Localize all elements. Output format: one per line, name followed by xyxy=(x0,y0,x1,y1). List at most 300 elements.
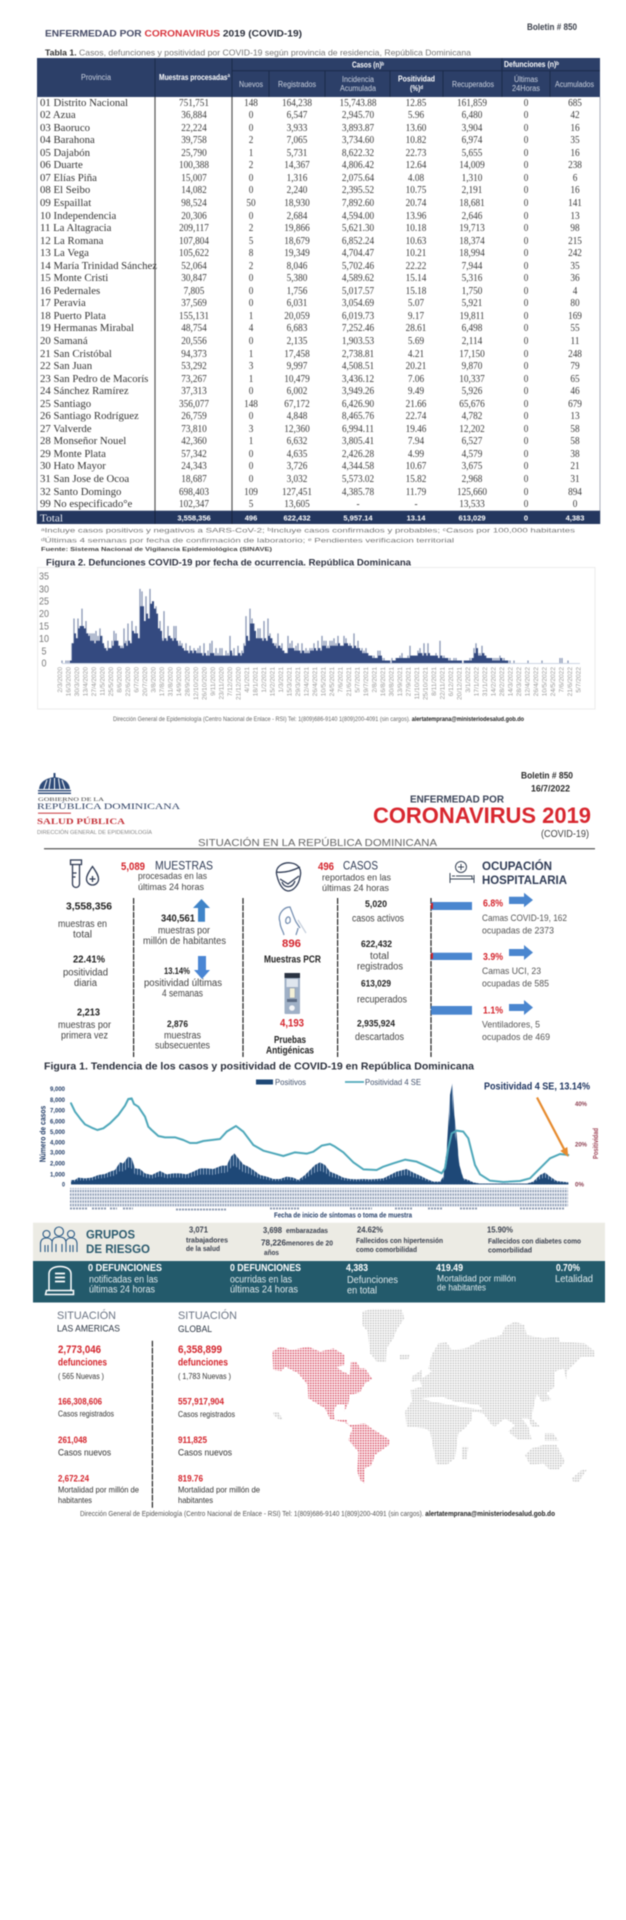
risk: pregnant and minors: embarazadas xyxy=(286,1226,328,1235)
column: registered cases: 6,002 xyxy=(287,385,307,397)
column: new cases: 0 xyxy=(249,448,253,460)
column: registered cases: 6,683 xyxy=(287,322,307,334)
date axis labels: 2/8/2021 xyxy=(372,667,378,693)
column: province: 11 La Altagracia xyxy=(40,222,111,234)
title block xyxy=(373,794,591,840)
bars: daily deaths xyxy=(62,589,568,663)
column: new cases: 1 xyxy=(249,435,253,447)
column: samples per million and positivity: 13.14% xyxy=(164,966,190,976)
table header: Últimas xyxy=(514,75,538,84)
column: case status: descartados xyxy=(355,1032,404,1043)
column: registered cases: 127,451 xyxy=(282,486,312,498)
column: sample totals: diaria xyxy=(74,978,98,989)
column: recovered: 10,337 xyxy=(459,373,485,385)
casos heading: últimas 24 horas xyxy=(322,883,389,894)
column: province: 06 Duarte xyxy=(40,159,82,171)
column: registered cases: 2,135 xyxy=(287,335,307,347)
date axis labels: 16/3/2020 xyxy=(66,667,72,696)
date axis labels: 4/1/2021 xyxy=(244,667,251,693)
column: samples processed: 751,751 xyxy=(179,97,209,109)
column: samples processed: 36,884 xyxy=(181,109,207,121)
column: province: 14 María Trinidad Sánchez xyxy=(40,260,157,272)
date axis labels: 30/3/2020 xyxy=(74,667,81,696)
column: province: 21 San Cristóbal xyxy=(40,348,111,360)
column: recovered: 3,675 xyxy=(462,460,482,472)
column: deaths last 24 hours: 0 xyxy=(524,235,528,247)
column: registered cases: 19,349 xyxy=(284,247,310,259)
column: registered cases: 3,933 xyxy=(287,122,307,134)
table total row: 613,029 xyxy=(458,513,486,522)
column: samples processed: 30,847 xyxy=(181,272,207,284)
column: cumulative deaths: 0 xyxy=(573,498,577,510)
column: cumulative incidence: 3,436.12 xyxy=(342,373,374,385)
column: cumulative incidence: 3,734.60 xyxy=(342,134,374,146)
panel: situation in the Americas: LAS AMERICAS xyxy=(57,1324,120,1335)
antigen stat: 4,193 xyxy=(280,1017,304,1029)
date axis labels: 7/6/2022 xyxy=(558,667,566,693)
risk: pregnant and minors: 3,698 xyxy=(263,1226,283,1235)
column: positivity: 20.74 xyxy=(406,197,426,209)
table footnotes: ᵃIncluye casos positivos y negativos a SARS-CoV-2; ᵇIncluye casos confirmados y probables; ᶜCasos por 100,000 habitantes xyxy=(41,527,576,534)
column: samples processed: 7,805 xyxy=(184,285,204,297)
risk: diabetes: 15.90% xyxy=(487,1226,513,1234)
muestras heading xyxy=(121,860,213,893)
column: samples processed: 98,524 xyxy=(181,197,207,209)
date axis labels: 21/6/2021 xyxy=(346,667,353,696)
table header: Acumulados xyxy=(555,80,594,89)
column: samples processed: 698,403 xyxy=(179,486,209,498)
column: registered cases: 164,238 xyxy=(282,97,312,109)
column: samples processed: 73,810 xyxy=(181,423,207,435)
column: recovered: 13,533 xyxy=(459,498,485,510)
lethality: 0.70% xyxy=(556,1263,580,1274)
date axis labels: 28/2/2022 xyxy=(499,667,506,696)
column: cumulative incidence: 4,704.47 xyxy=(342,247,374,259)
risk: pregnant and minors: menores de 20 xyxy=(286,1238,333,1248)
column: cumulative deaths: 215 xyxy=(568,235,582,247)
table footnotes xyxy=(41,527,576,553)
column: deaths last 24 hours: 0 xyxy=(524,435,528,447)
panel: global situation: defunciones xyxy=(178,1358,228,1369)
column: samples processed xyxy=(178,97,210,510)
column: recovered: 17,150 xyxy=(459,348,485,360)
table header: Nuevos xyxy=(239,80,263,89)
column: cumulative deaths: 58 xyxy=(570,423,580,435)
column: cumulative deaths: 16 xyxy=(570,184,580,196)
date axis labels: 17/8/2020 xyxy=(159,667,166,696)
icon: tombstone xyxy=(46,1266,74,1294)
column: case status: 622,432 xyxy=(361,939,392,950)
muestras heading: MUESTRAS xyxy=(155,860,213,872)
column: registered cases: 18,679 xyxy=(284,235,310,247)
map: rest of the world xyxy=(273,1309,595,1482)
column: samples processed: 356,077 xyxy=(179,398,209,410)
date axis labels: 25/5/2020 xyxy=(108,667,115,696)
table total row: Total xyxy=(40,512,63,524)
panel: risk groups: GRUPOS xyxy=(86,1228,135,1242)
column: province: 30 Hato Mayor xyxy=(40,460,105,472)
column: positivity: 11.79 xyxy=(406,486,426,498)
column: samples processed: 20,556 xyxy=(181,335,207,347)
column: samples processed: 14,082 xyxy=(181,184,207,196)
column: sample totals: 22.41% xyxy=(73,953,106,965)
column: cumulative incidence: 15,743.88 xyxy=(340,97,376,109)
chart: deaths by date xyxy=(38,568,595,709)
column: registered cases: 2,684 xyxy=(287,210,307,222)
right axis labels xyxy=(575,1101,600,1188)
column: positivity: 10.82 xyxy=(406,134,426,146)
column: positivity: 22.22 xyxy=(406,260,426,272)
column: province: 26 Santiago Rodríguez xyxy=(40,410,138,422)
column: registered cases: 19,866 xyxy=(284,222,310,234)
column: cumulative incidence: 6,994.11 xyxy=(342,423,374,435)
column: samples processed: 100,388 xyxy=(179,159,209,171)
table total row: 4,383 xyxy=(566,513,584,522)
risk: pregnant and minors xyxy=(261,1226,333,1257)
y axis labels: 30 xyxy=(39,583,49,595)
column: deaths last 24 hours: 0 xyxy=(524,373,528,385)
deaths occurred xyxy=(230,1263,301,1295)
y axis labels: 25 xyxy=(39,596,49,608)
column: registered cases: 7,065 xyxy=(287,134,307,146)
column: registered cases: 4,848 xyxy=(287,410,307,422)
column: province: 03 Baoruco xyxy=(40,122,89,134)
column: cumulative deaths: 16 xyxy=(570,122,580,134)
column: samples per million and positivity: millón de habitantes xyxy=(143,936,226,947)
table header: Defunciones (n)ᵇ xyxy=(504,60,559,69)
bars: positive cases xyxy=(71,1083,568,1184)
column: cumulative deaths: 65 xyxy=(570,373,580,385)
column: cumulative deaths: 36 xyxy=(570,272,580,284)
column: deaths last 24 hours: 0 xyxy=(524,498,528,510)
risk: pregnant and minors: años xyxy=(264,1248,279,1257)
logo: Gobierno de la República Dominicana: GOBIERNO DE LA xyxy=(38,797,104,803)
date axis labels: 15/3/2021 xyxy=(286,667,294,696)
column: deaths last 24 hours: 0 xyxy=(524,109,528,121)
date axis labels: 15/2/2021 xyxy=(270,667,276,696)
column: recovered: 5,921 xyxy=(462,297,482,309)
ocupacion hospitalaria heading: OCUPACIÓN xyxy=(482,860,552,873)
column: registered cases: 14,367 xyxy=(284,159,310,171)
column: positivity: 10.21 xyxy=(406,247,426,259)
column: samples per million and positivity: muestras por xyxy=(158,926,211,937)
column: case status xyxy=(352,899,407,1043)
column: cumulative deaths: 46 xyxy=(570,385,580,397)
muestras heading: 5,089 xyxy=(121,861,145,873)
table total row: 5,957.14 xyxy=(343,513,373,522)
chart: cases and positivity trend xyxy=(38,1078,600,1220)
logo: Gobierno de la República Dominicana xyxy=(37,773,180,836)
bulletin number and date xyxy=(521,770,573,794)
column: cumulative incidence: 3,054.69 xyxy=(342,297,374,309)
date axis labels: 12/10/2020 xyxy=(193,667,200,700)
column dividers xyxy=(134,898,431,1057)
icon: hospital bed xyxy=(450,862,474,883)
deaths notified: notificadas en las xyxy=(89,1274,158,1285)
column: cumulative incidence: 4,344.58 xyxy=(342,460,374,472)
column: new cases: 0 xyxy=(249,473,253,485)
column: deaths last 24 hours: 0 xyxy=(524,184,528,196)
column: recovered: 2,114 xyxy=(462,335,482,347)
map: Americas highlighted xyxy=(272,1347,390,1483)
column: new cases: 50 xyxy=(246,197,256,209)
column: cumulative incidence: 7,892.60 xyxy=(342,197,374,209)
column: registered cases: 2,240 xyxy=(287,184,307,196)
column: case status: recuperados xyxy=(357,994,407,1005)
column: new cases: 0 xyxy=(249,385,253,397)
date axis labels: 21/12/2020 xyxy=(236,667,242,700)
column: new cases: 0 xyxy=(249,272,253,284)
divider: situation columns xyxy=(151,1341,153,1508)
column: positivity: 5.07 xyxy=(408,297,424,309)
table body rules xyxy=(155,97,232,511)
date axis labels: 17/1/2022 xyxy=(474,667,480,696)
column: deaths last 24 hours: 0 xyxy=(524,97,528,109)
occupancy: ventilators: ocupados de 469 xyxy=(482,1032,550,1043)
date axis labels: 20/7/2020 xyxy=(142,667,149,696)
date axis labels: 25/10/2021 xyxy=(422,667,430,700)
left axis labels: 9,000 xyxy=(50,1086,65,1093)
column: cumulative deaths: 98 xyxy=(570,222,580,234)
column: new cases: 4 xyxy=(249,322,253,334)
column: cumulative incidence: 5,573.02 xyxy=(342,473,374,485)
column: samples per million and positivity: positividad últimas xyxy=(144,978,222,989)
date axis labels: 26/4/2021 xyxy=(312,667,319,696)
y axis labels: 15 xyxy=(39,621,49,633)
column: case status: 613,029 xyxy=(361,979,391,990)
column: new cases: 0 xyxy=(249,335,253,347)
total deaths: Defunciones xyxy=(347,1275,398,1286)
column: deaths last 24 hours: 0 xyxy=(524,197,528,209)
date axis labels: 26/4/2022 xyxy=(533,667,540,696)
column: province: 20 Samaná xyxy=(40,335,87,347)
column: recovered: 18,994 xyxy=(459,247,485,259)
column: registered cases: 3,032 xyxy=(287,473,307,485)
column: cumulative deaths: 4 xyxy=(573,285,577,297)
column: deaths last 24 hours: 0 xyxy=(524,486,528,498)
risk: pregnant and minors: 78,226 xyxy=(261,1238,287,1248)
panel: situation in the Americas: defunciones xyxy=(58,1357,107,1368)
column: registered cases: 1,316 xyxy=(287,172,307,184)
column: positivity: 4.99 xyxy=(408,448,424,460)
date axis labels: 13/9/2021 xyxy=(397,667,404,696)
column: registered cases: 67,172 xyxy=(284,398,310,410)
column: positivity: 10.18 xyxy=(406,222,426,234)
table header: Recuperados xyxy=(452,80,494,89)
column: province: 04 Barahona xyxy=(40,134,94,146)
column: cumulative incidence: 2,395.52 xyxy=(342,184,374,196)
figure 2 heading: Figura 2. Defunciones COVID-19 por fecha de ocurrencia. República Dominicana xyxy=(46,557,412,568)
column: recovered: 6,527 xyxy=(462,435,482,447)
date axis labels: 7/6/2021 xyxy=(338,667,344,693)
column: cumulative deaths: 80 xyxy=(570,297,580,309)
column: new cases: 2 xyxy=(249,134,253,146)
column: cumulative deaths: 42 xyxy=(570,109,580,121)
column: samples processed: 37,569 xyxy=(181,297,207,309)
column: deaths last 24 hours: 0 xyxy=(524,322,528,334)
table total row: 3,558,356 xyxy=(177,513,211,522)
column: positivity: 10.63 xyxy=(406,235,426,247)
total deaths: 4,383 xyxy=(346,1263,368,1274)
date axis labels: 8/11/2021 xyxy=(431,667,438,696)
title, page 1: ENFERMEDAD POR CORONAVIRUS 2019 (COVID-19) xyxy=(45,28,302,40)
left axis labels: 7,000 xyxy=(50,1107,65,1114)
panel: global situation: Mortalidad por millón de xyxy=(178,1484,260,1494)
date axis labels: 8/6/2020 xyxy=(116,667,124,693)
column: cumulative incidence: 4,589.62 xyxy=(342,272,374,284)
table header: Incidencia xyxy=(342,75,374,84)
icon: dome xyxy=(38,773,71,794)
column: positivity: 10.67 xyxy=(406,460,426,472)
deaths notified xyxy=(88,1263,162,1295)
chart baseline xyxy=(62,662,580,664)
panel: global situation: habitantes xyxy=(178,1495,213,1505)
logo: Gobierno de la República Dominicana: DIRECCIÓN GENERAL DE EPIDEMIOLOGÍA xyxy=(37,829,152,836)
column: new cases: 0 xyxy=(249,460,253,472)
occupancy: COVID beds xyxy=(431,893,567,937)
column: positivity: 4.21 xyxy=(408,348,424,360)
risk: diabetes: comorbilidad xyxy=(488,1245,532,1254)
column: province: 29 Monte Plata xyxy=(40,448,105,460)
column: cumulative deaths: 35 xyxy=(570,260,580,272)
column: registered cases: 17,458 xyxy=(284,348,310,360)
arrow: down xyxy=(194,956,210,979)
table total row: 0 xyxy=(524,513,528,522)
panel: global situation: Casos nuevos xyxy=(178,1447,232,1458)
panel: situation in the Americas xyxy=(57,1309,139,1505)
column: registered cases: 12,360 xyxy=(284,423,310,435)
column: province: 18 Puerto Plata xyxy=(40,310,105,322)
column: new cases: 1 xyxy=(249,373,253,385)
column: province: 09 Espaillat xyxy=(40,197,91,209)
table total row: 496 xyxy=(245,513,257,522)
column: new cases: 0 xyxy=(249,297,253,309)
date axis labels: 26/10/2020 xyxy=(202,667,208,700)
legend xyxy=(256,1078,421,1087)
left axis labels: 1,000 xyxy=(50,1171,65,1178)
column: hospital occupancy xyxy=(431,893,567,1043)
column: registered cases: 6,632 xyxy=(287,435,307,447)
column: new cases: 0 xyxy=(249,109,253,121)
date axis labels: 30/8/2021 xyxy=(388,667,396,696)
panel: situation in the Americas: SITUACIÓN xyxy=(57,1309,116,1322)
column: samples processed: 52,064 xyxy=(181,260,207,272)
column: recovered: 5,655 xyxy=(462,147,482,159)
date axis labels: 5/7/2021 xyxy=(354,667,362,693)
column: cumulative deaths: 141 xyxy=(568,197,582,209)
table header: Casos (n)ᵇ xyxy=(352,60,384,70)
risk: hypertension: como comorbilidad xyxy=(356,1245,417,1254)
column: registered cases: 9,997 xyxy=(287,360,307,372)
column: cumulative deaths: 35 xyxy=(570,134,580,146)
panel: risk groups xyxy=(33,1223,605,1261)
column: new cases: 0 xyxy=(249,122,253,134)
y axis labels: 35 xyxy=(39,571,49,583)
panel: global situation: SITUACIÓN xyxy=(178,1309,237,1322)
table header: Muestras procesadasª xyxy=(159,73,230,82)
deaths occurred: ocurridas en las xyxy=(230,1274,292,1285)
column: province: 17 Peravia xyxy=(40,297,85,309)
column: registered cases: 1,756 xyxy=(287,285,307,297)
date axis labels: 16/8/2021 xyxy=(380,667,387,696)
column: registered cases xyxy=(282,97,312,510)
column: deaths last 24 hours: 0 xyxy=(524,159,528,171)
date axis labels: 18/1/2021 xyxy=(252,667,260,696)
column: cumulative deaths: 242 xyxy=(568,247,582,259)
legend: Positividad 4 SE xyxy=(365,1078,421,1087)
column: samples processed: 102,347 xyxy=(179,498,209,510)
panel: global situation xyxy=(178,1309,260,1505)
y axis labels: 0 xyxy=(42,658,47,670)
column: samples processed: 15,007 xyxy=(181,172,207,184)
table total row: 622,432 xyxy=(283,513,311,522)
column: deaths last 24 hours: 0 xyxy=(524,473,528,485)
date axis labels: 24/5/2021 xyxy=(329,667,336,696)
column: sample totals: 3,558,356 xyxy=(66,900,112,912)
table footnotes: Fuente: Sistema Nacional de Vigilancia Epidemiológica (SINAVE) xyxy=(41,547,272,553)
date axis labels: 20/12/2021 xyxy=(456,667,464,700)
column: positivity: 28.61 xyxy=(406,322,426,334)
column: recovered: 5,316 xyxy=(462,272,482,284)
date axis labels: 11/5/2020 xyxy=(100,667,106,696)
risk: hypertension: 24.62% xyxy=(357,1226,383,1234)
contact footer, page 1: Dirección General de Epidemiología (Centro Nacional de Enlace - RSI) Tel: 1(809)686-9140 1(809)200-4091 (sin cargos). alertatemprana@ministeriodesalud.gob.do xyxy=(113,716,524,723)
left axis labels: 2,000 xyxy=(50,1160,65,1167)
column: recovered: 7,944 xyxy=(462,260,482,272)
column: deaths last 24 hours: 0 xyxy=(524,260,528,272)
column: cumulative incidence: 6,852.24 xyxy=(342,235,374,247)
callout: positivity value: Positividad 4 SE, 13.14% xyxy=(484,1080,591,1092)
column: recovered: 12,202 xyxy=(459,423,485,435)
column: cumulative incidence: 2,075.64 xyxy=(342,172,374,184)
muestras heading: procesadas en las xyxy=(138,871,207,882)
deaths notified: últimas 24 horas xyxy=(89,1284,155,1295)
column: deaths last 24 hours: 0 xyxy=(524,460,528,472)
bulletin number and date: 16/7/2022 xyxy=(531,783,570,794)
column: deaths last 24 hours: 0 xyxy=(524,222,528,234)
column: cumulative deaths: 685 xyxy=(568,97,582,109)
risk: diabetes xyxy=(487,1226,581,1254)
column: registered cases: 10,479 xyxy=(284,373,310,385)
column: positivity: 22.73 xyxy=(406,147,426,159)
column: province: 23 San Pedro de Macorís xyxy=(40,373,148,385)
column: cumulative incidence: 8,465.76 xyxy=(342,410,374,422)
column: positivity: 5.96 xyxy=(408,109,424,121)
column: province: 19 Hermanas Mirabal xyxy=(40,322,134,334)
mortality per million: Mortalidad por millón xyxy=(437,1274,516,1284)
column: registered cases: 5,380 xyxy=(287,272,307,284)
column: samples processed: 26,759 xyxy=(181,410,207,422)
table header: Positividad xyxy=(398,74,435,84)
column: cumulative incidence: 3,949.26 xyxy=(342,385,374,397)
PCR stat: Muestras PCR xyxy=(264,954,322,965)
panel: global situation: GLOBAL xyxy=(178,1324,212,1335)
column: new cases: 1 xyxy=(249,147,253,159)
column: new cases: 0 xyxy=(249,172,253,184)
column: positivity: 5.69 xyxy=(408,335,424,347)
title block: ENFERMEDAD POR xyxy=(410,794,504,806)
column: positivity: 12.85 xyxy=(406,97,426,109)
date axis labels: 3/1/2022 xyxy=(465,667,472,693)
column: new cases: 5 xyxy=(249,498,253,510)
column: province: 12 La Romana xyxy=(40,235,103,247)
column: samples per million and positivity: 4 semanas xyxy=(162,989,203,1000)
dotted world map xyxy=(272,1309,595,1483)
column: deaths last 24 hours: 0 xyxy=(524,134,528,146)
table total row xyxy=(37,511,600,524)
column: deaths last 24 hours: 0 xyxy=(524,410,528,422)
column: cumulative incidence: 4,594.00 xyxy=(342,210,374,222)
